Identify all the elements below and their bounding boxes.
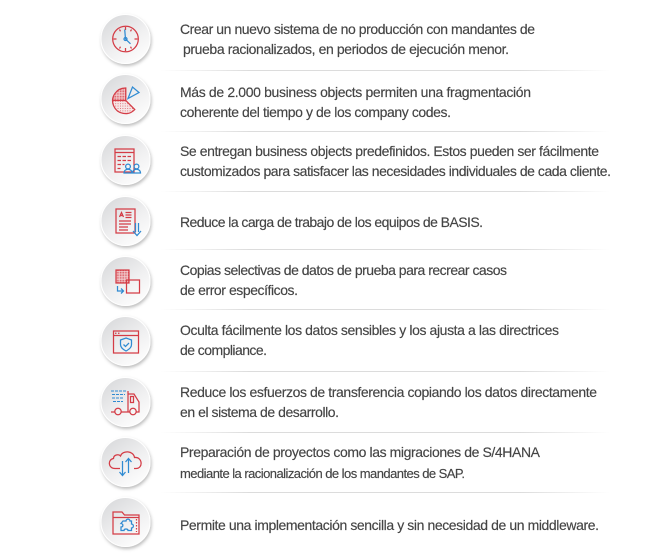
row 3: building and people icon badge <box>101 136 150 184</box>
row 5: text: de error específicos. <box>180 282 298 298</box>
row 7: text: Reduce los esfuerzos de transferencia copiando los datos directamente <box>180 384 597 400</box>
row 8: text <box>180 444 541 481</box>
row 1: text <box>180 21 535 57</box>
row 3: text: customizados para satisfacer las necesidades individuales de cada cliente. <box>180 163 611 179</box>
row 1: text: Crear un nuevo sistema de no producción con mandantes de <box>180 21 535 37</box>
row 3: text <box>180 143 611 179</box>
row 6: browser window with shield icon badge <box>101 316 150 366</box>
row 7: text <box>180 384 597 420</box>
row 4: text: Reduce la carga de trabajo de los equipos de BASIS. <box>180 214 483 230</box>
row 6: text <box>180 322 559 358</box>
row 6: text: de compliance. <box>180 342 267 358</box>
row 7: text: en el sistema de desarrollo. <box>180 404 339 420</box>
row 1: text: prueba racionalizados, en periodos de ejecución menor. <box>183 41 509 57</box>
row 4: document with arrow icon badge <box>101 196 150 246</box>
row 1: clock icon badge <box>101 14 150 64</box>
row 6: text: Oculta fácilmente los datos sensibles y los ajusta a las directrices <box>180 322 559 338</box>
row 7: delivery truck icon badge <box>101 378 150 426</box>
row 5: text <box>180 262 507 298</box>
row 9: folder with puzzle piece icon badge <box>101 498 150 546</box>
row 8: cloud transfer icon badge <box>101 438 150 486</box>
row 5: copy squares icon badge <box>101 256 150 306</box>
row 2: text: coherente del tiempo y de los company codes. <box>180 104 451 120</box>
row 2: text: Más de 2.000 business objects permiten una fragmentación <box>180 84 531 100</box>
row 9: text: Permite una implementación sencilla y sin necesidad de un middleware. <box>180 517 599 533</box>
row 2: text <box>180 84 531 120</box>
row 5: text: Copias selectivas de datos de prueba para recrear casos <box>180 262 507 278</box>
row 2: pie chart icon badge <box>101 74 150 124</box>
row 8: text: Preparación de proyectos como las migraciones de S/4HANA <box>180 444 541 460</box>
row 8: text: mediante la racionalización de los mandantes de SAP. <box>180 466 465 481</box>
row 3: text: Se entregan business objects predefinidos. Estos pueden ser fácilmente <box>180 143 599 159</box>
